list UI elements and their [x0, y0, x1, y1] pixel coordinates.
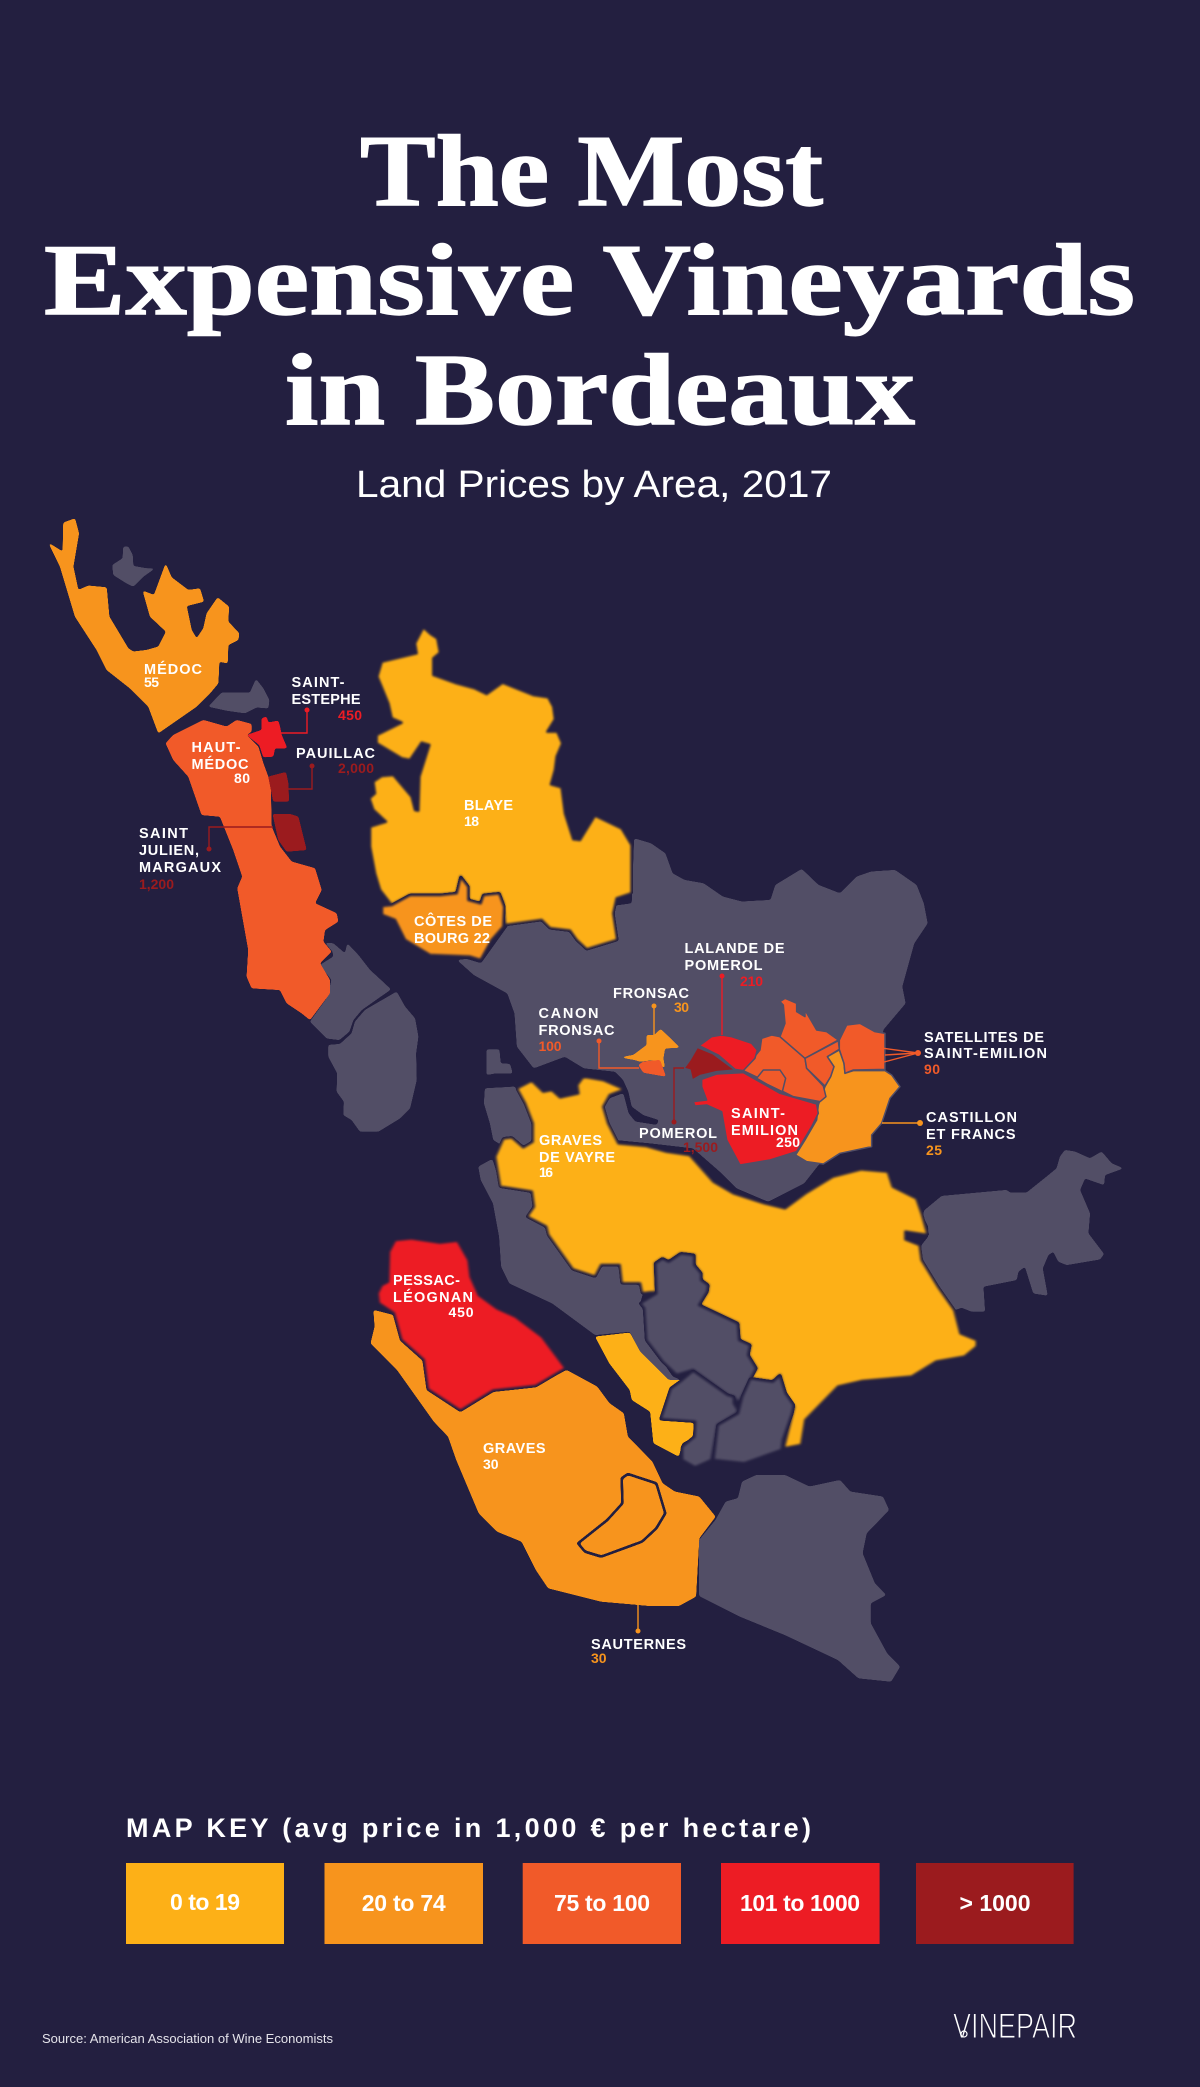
region: grey long strip: [478, 1159, 681, 1383]
label: Saint-Estèphe: ESTEPHE: [292, 692, 361, 708]
title: in Bordeaux: [285, 334, 915, 447]
subtitle: Land Prices by Area, 2017: [356, 464, 832, 506]
key: 0 to 19: 0 to 19: [170, 1889, 240, 1915]
key: 0 to 19: [126, 1863, 284, 1944]
label: Fronsac: 30: [674, 999, 689, 1015]
key: 20 to 74: 20 to 74: [362, 1890, 446, 1916]
label: Lalande de Pomerol: LALANDE DE: [684, 941, 785, 957]
label: Graves de Vayre: 16: [539, 1164, 553, 1180]
region: Médoc: [48, 518, 239, 733]
map of Bordeaux: [48, 518, 1123, 1682]
region: Castillon et Francs: [796, 1050, 900, 1164]
region: Sauternes outline: [578, 1474, 665, 1557]
key: 101 to 1000: 101 to 1000: [740, 1890, 860, 1916]
label: Saint-Emilion: 250: [776, 1134, 800, 1150]
region: Fronsac: [620, 1029, 680, 1068]
region: Saint Julien, Margaux: [273, 814, 307, 852]
label: Médoc: [144, 661, 203, 690]
title: [44, 115, 1135, 447]
region: Satellites C: [805, 1041, 839, 1086]
leader: Fronsac: [652, 1004, 656, 1035]
label: Graves: 30: [483, 1456, 499, 1472]
label: Saint-Emilion: [731, 1106, 800, 1150]
key: over 1000: [916, 1863, 1074, 1944]
leader: Castillon et Francs: [882, 1120, 923, 1126]
label: Sauternes: SAUTERNES: [591, 1637, 686, 1653]
region: Satellites inner: [757, 1070, 786, 1092]
region: Satellites D: [839, 1023, 885, 1073]
region: grey small river piece B: [484, 1087, 533, 1148]
label: Graves de Vayre: GRAVES: [539, 1133, 602, 1149]
region: Graves: [371, 1310, 716, 1606]
label: Graves de Vayre: [539, 1133, 615, 1180]
label: Blaye: 18: [464, 813, 479, 829]
region: grey far east: [920, 1150, 1123, 1312]
label: Haut-Médoc: 80: [234, 770, 250, 786]
label: Côtes de Bourg: BOURG 22: [414, 931, 490, 947]
label: Saint Julien, Margaux: SAINT: [139, 826, 188, 842]
logo: VinePair: VINEPAIR: [953, 2007, 1077, 2046]
map key: [126, 1813, 1074, 1944]
key: 75 to 100: [523, 1863, 681, 1944]
region: Saint-Emilion: [693, 1073, 818, 1165]
region: grey south: [699, 1475, 900, 1682]
region: grey small Médoc south: [208, 679, 269, 713]
label: Satellites de Saint-Emilion: SATELLITES DE: [924, 1030, 1044, 1046]
source note: Source: American Association of Wine Economists: [42, 2031, 333, 2046]
label: Côtes de Bourg: [414, 912, 492, 947]
label: Pomerol: 1,500: [683, 1139, 718, 1155]
leader: Sauternes: [636, 1605, 640, 1634]
label: Satellites de Saint-Emilion: 90: [924, 1061, 940, 1077]
label: Haut-Médoc: HAUT-: [192, 740, 241, 756]
region: Satellites A: [743, 1035, 826, 1102]
label: Graves: [483, 1441, 546, 1472]
region: grey west lower: [328, 992, 418, 1132]
leader: Saint-Estèphe: [281, 708, 310, 733]
key: 75 to 100: 75 to 100: [554, 1890, 650, 1916]
label: Canon Fronsac: [538, 1006, 615, 1054]
region: Graves de Vayre: [495, 1077, 977, 1448]
key: over 1000: > 1000: [960, 1890, 1030, 1916]
label: Médoc: MÉDOC: [144, 661, 203, 678]
key: 101 to 1000: [721, 1863, 880, 1944]
label: Saint-Emilion: EMILION: [731, 1123, 798, 1139]
region: Saint-Estèphe: [247, 717, 287, 757]
label: Fronsac: [613, 986, 690, 1015]
label: Satellites de Saint-Emilion: [924, 1030, 1047, 1077]
label: Haut-Médoc: [192, 740, 250, 786]
region: Satellites B: [780, 998, 838, 1058]
region: Pessac-Léognan: [378, 1238, 566, 1411]
region: grey small river piece A: [487, 1049, 513, 1075]
label: Canon Fronsac: CANON: [538, 1006, 598, 1022]
label: Lalande de Pomerol: POMEROL: [684, 958, 763, 974]
region: Graves de Vayre south strip: [595, 1333, 695, 1457]
leader: Pauillac: [287, 764, 314, 789]
key: 20 to 74: [324, 1863, 483, 1944]
region: Haut-Médoc: [166, 720, 338, 1020]
leader: Canon Fronsac: [596, 1038, 639, 1068]
label: Graves: GRAVES: [483, 1441, 546, 1457]
region: grey interior F: [714, 1375, 794, 1463]
label: Blaye: [464, 798, 513, 829]
label: Pomerol: POMEROL: [639, 1126, 717, 1142]
label: Graves de Vayre: DE VAYRE: [539, 1150, 615, 1166]
label: Saint Julien, Margaux: [139, 826, 221, 892]
region: Pomerol: [684, 1047, 735, 1080]
label: Canon Fronsac: 100: [538, 1038, 562, 1054]
label: Canon Fronsac: FRONSAC: [538, 1023, 615, 1039]
label: Haut-Médoc: MÉDOC: [192, 756, 249, 773]
label: Castillon et Francs: 25: [926, 1142, 942, 1158]
leader: Pomerol: [672, 1068, 684, 1124]
label: Pessac-Léognan: 450: [448, 1304, 474, 1320]
leader: Satellites de Saint-Emilion: [881, 1048, 921, 1062]
label: Satellites de Saint-Emilion: SAINT-EMILION: [924, 1046, 1047, 1062]
label: Pessac-Léognan: [393, 1273, 474, 1320]
label: Saint-Estèphe: SAINT-: [292, 675, 345, 691]
label: Pessac-Léognan: PESSAC-: [393, 1273, 460, 1289]
leader: Saint Julien, Margaux: [206, 827, 273, 852]
label: Pauillac: 2,000: [338, 760, 374, 776]
label: Saint Julien, Margaux: JULIEN,: [139, 843, 199, 859]
label: Pauillac: PAUILLAC: [296, 746, 376, 762]
region: Pauillac: [268, 772, 289, 802]
label: Sauternes: 30: [591, 1650, 607, 1666]
region: grey central right bank: [457, 838, 928, 1202]
region: grey interior D: [640, 1253, 756, 1403]
label: Pomerol: [639, 1126, 718, 1155]
label: Castillon et Francs: ET FRANCS: [926, 1127, 1016, 1143]
label: Pauillac: [296, 746, 376, 776]
leader: Lalande de Pomerol: [720, 974, 724, 1035]
region: Canon Fronsac: [638, 1060, 666, 1077]
label: Sauternes: [591, 1637, 686, 1666]
label: Côtes de Bourg: CÔTES DE: [414, 912, 492, 930]
region: grey interior E: [660, 1371, 738, 1467]
label: Pessac-Léognan: LÉOGNAN: [393, 1289, 473, 1306]
label: Castillon et Francs: [926, 1110, 1017, 1158]
label: Saint-Estèphe: [292, 675, 362, 723]
label: Fronsac: FRONSAC: [613, 986, 690, 1002]
title: The Most: [360, 115, 823, 228]
label: Médoc: 55: [144, 674, 159, 690]
label: Saint Julien, Margaux: MARGAUX: [139, 860, 221, 876]
map key heading: MAP KEY (avg price in 1,000 € per hectare): [126, 1813, 811, 1843]
region: grey west upper: [310, 943, 391, 1040]
label: Castillon et Francs: CASTILLON: [926, 1110, 1017, 1126]
label: Blaye: BLAYE: [464, 798, 513, 814]
label: Saint-Estèphe: 450: [338, 707, 362, 723]
region: grey small Médoc north: [112, 547, 155, 587]
label: Lalande de Pomerol: [684, 941, 785, 989]
region: Lalande de Pomerol: [699, 1035, 757, 1071]
title: Expensive Vineyards: [44, 224, 1135, 337]
region: Blaye: [369, 627, 632, 949]
region: Côtes de Bourg: [382, 877, 504, 960]
label: Saint-Emilion: SAINT-: [731, 1106, 785, 1122]
label: Saint Julien, Margaux: 1,200: [139, 876, 174, 892]
label: Lalande de Pomerol: 210: [740, 973, 763, 989]
